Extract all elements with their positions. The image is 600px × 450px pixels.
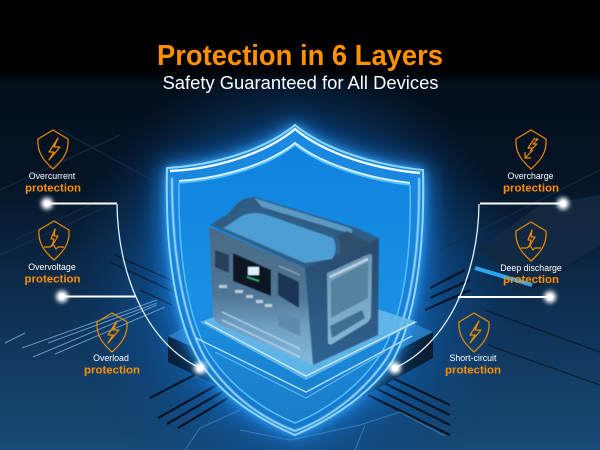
- handle and opening: [223, 213, 336, 263]
- callout: short-circuit: [445, 313, 501, 376]
- callout: overload: protection: [84, 364, 140, 376]
- callout: overvoltage: [24, 221, 81, 286]
- title: Protection in 6 Layers: [157, 40, 443, 72]
- callout: overvoltage: protection: [24, 274, 81, 286]
- callout: overvoltage: Overvoltage: [28, 262, 76, 272]
- display: [233, 253, 271, 296]
- callout: deep discharge: [500, 222, 562, 286]
- device side face: [305, 238, 379, 365]
- callout: overcharge: Overcharge: [508, 171, 554, 181]
- callout: deep discharge: Deep discharge: [500, 263, 562, 273]
- button panel: [215, 250, 229, 273]
- side grid panel: [327, 254, 372, 344]
- top header band: [0, 0, 600, 84]
- callout: overcurrent: Overcurrent: [29, 171, 76, 181]
- base platform: [168, 270, 433, 428]
- callout: overcharge: [503, 130, 559, 194]
- callout: deep discharge: protection: [503, 274, 559, 286]
- power station device: [209, 197, 379, 365]
- callout: overcurrent: protection: [25, 182, 81, 194]
- device top: [210, 197, 379, 268]
- callout: overload: [84, 313, 140, 376]
- callout lines: [41, 198, 569, 374]
- callout: overcharge: protection: [503, 182, 559, 194]
- shield: [167, 125, 423, 435]
- subtitle: Safety Guaranteed for All Devices: [162, 72, 438, 93]
- callout: short-circuit: protection: [445, 364, 501, 376]
- device front face: [209, 227, 313, 365]
- inner platform on shield: [196, 285, 418, 398]
- callout: overload: Overload: [93, 353, 129, 363]
- callout: short-circuit: Short-circuit: [450, 353, 497, 363]
- shield glow: [160, 120, 430, 440]
- socket: [278, 272, 299, 308]
- callout: overcurrent: [25, 130, 81, 194]
- ports row: [219, 285, 272, 307]
